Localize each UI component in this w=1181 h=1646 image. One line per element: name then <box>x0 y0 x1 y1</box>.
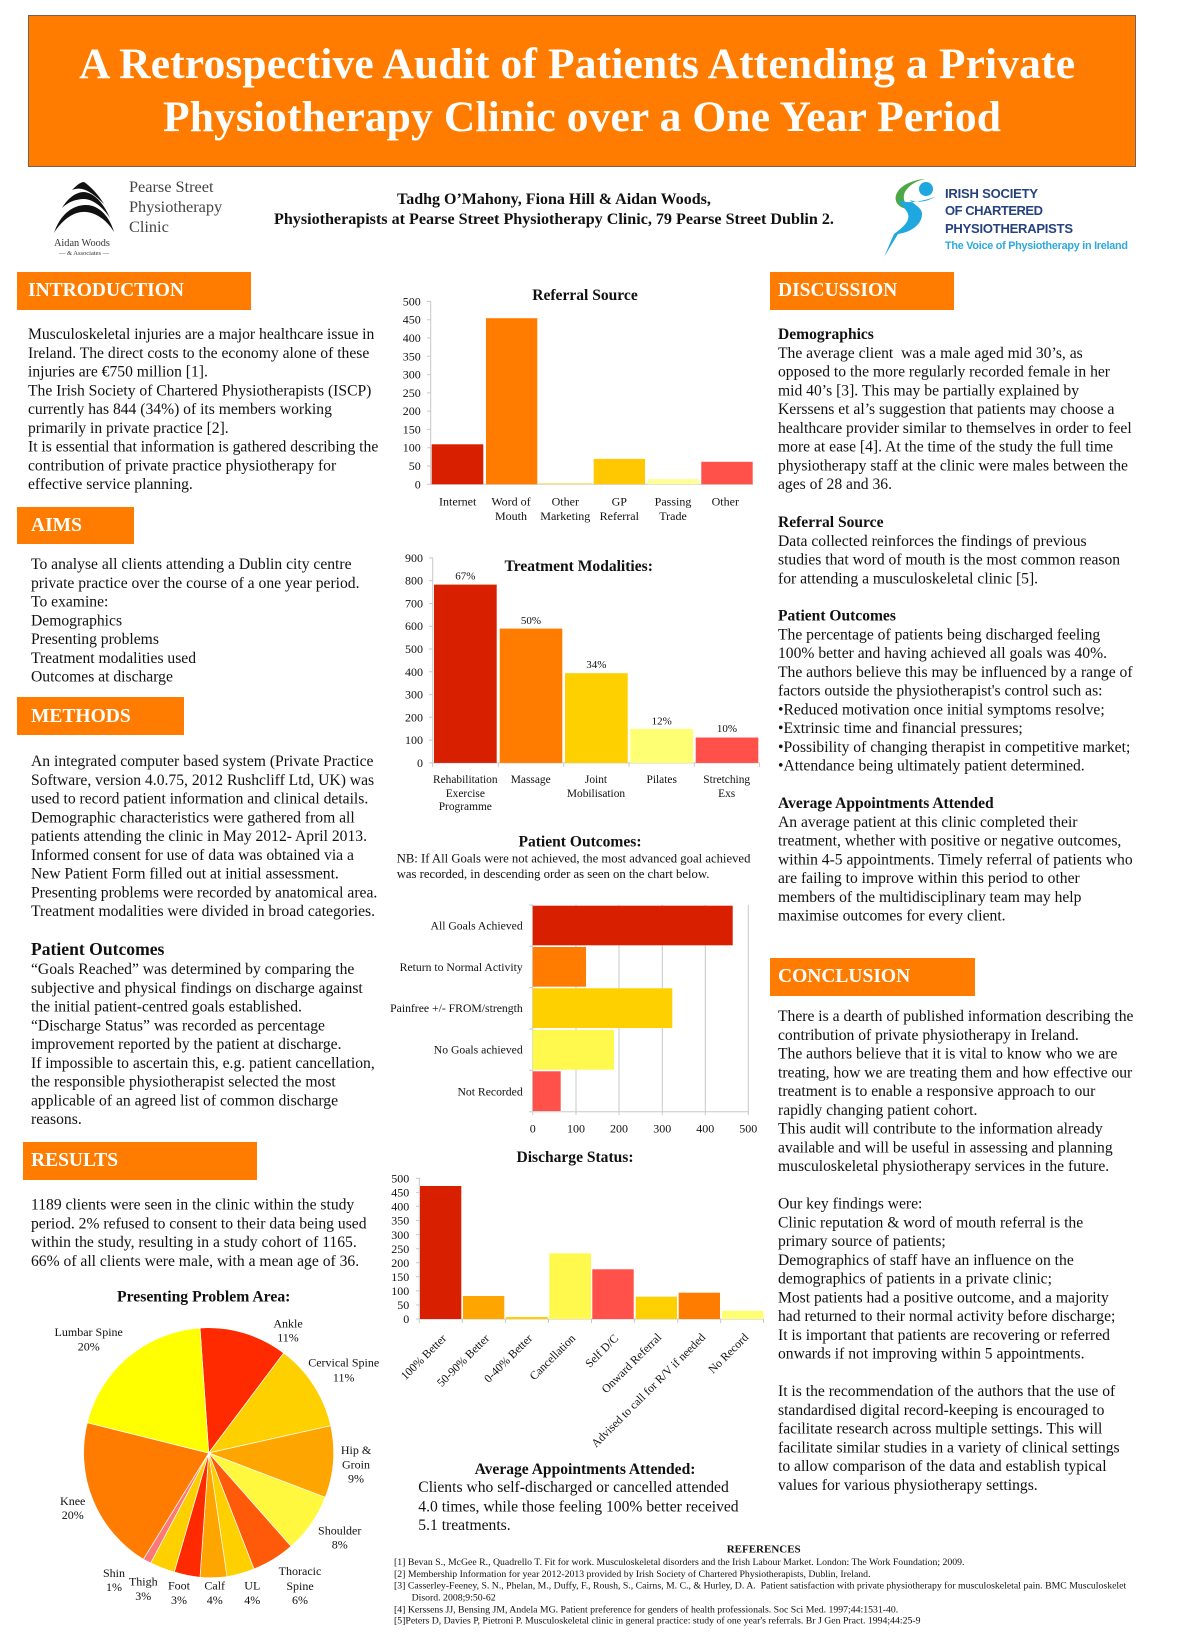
chart: presenting problem area pie <box>55 1289 379 1607</box>
x axis labels: 100 <box>567 1122 585 1136</box>
text block: average appointments: within 4-5 appointments. Timely referral of patients who <box>778 851 1133 868</box>
logo: Pearse Street Physiotherapy Clinic: Aidan Woods <box>54 238 110 249</box>
percentage labels: 34% <box>586 659 606 671</box>
logo: Irish Society of Chartered Physiotherapists <box>884 179 1128 257</box>
text block: demographics: healthcare provider similar to themselves in order to feel <box>778 420 1132 437</box>
chart title: Presenting Problem Area: <box>117 1289 290 1306</box>
category labels: Joint <box>585 774 608 786</box>
text block: referral source <box>778 514 1120 587</box>
text block: introduction: primarily in private practice [2]. <box>28 420 229 437</box>
rotated category labels: Advised to call for R/V if needed <box>589 1331 708 1450</box>
text block: demographics: The average client was a male aged mid 30’s, as <box>778 345 1083 362</box>
text block: recommendation <box>778 1383 1120 1494</box>
pie labels: Groin <box>342 1457 370 1471</box>
y axis labels: 150 <box>391 1270 409 1284</box>
heading: introduction <box>17 272 251 310</box>
y axis labels: 250 <box>403 386 421 400</box>
category labels: Referral <box>600 509 640 523</box>
pie labels: 6% <box>292 1593 308 1607</box>
text block: results: 1189 clients were seen in the clinic within the study <box>31 1197 354 1214</box>
text block: referral source: Data collected reinforces the findings of previous <box>778 533 1087 550</box>
y axis labels: 300 <box>405 688 423 702</box>
text block: introduction: The Irish Society of Chartered Physiotherapists (ISCP) <box>28 382 371 399</box>
category labels: Mouth <box>495 509 527 523</box>
text block: patient outcomes: •Reduced motivation once initial symptoms resolve; <box>778 701 1105 718</box>
text block: average appointments <box>778 795 1133 924</box>
pie slices <box>84 1328 334 1578</box>
chart: referral source <box>403 287 753 523</box>
panel: introduction <box>17 272 378 493</box>
text block: average appointments: members of the multidisciplinary team may help <box>778 889 1082 906</box>
y axis labels: 0 <box>415 477 421 491</box>
text block: key findings: Clinic reputation & word of mouth referral is the <box>778 1214 1083 1231</box>
text block: average appointments attended: 5.1 treatments. <box>418 1517 511 1534</box>
text block: average appointments attended: 4.0 times, while those feeling 100% better received <box>418 1499 739 1516</box>
text block: conclusion: The authors believe that it is vital to know who we are <box>778 1046 1117 1062</box>
category labels: Trade <box>659 509 687 523</box>
logo: Irish Society of Chartered Physiotherapists: IRISH SOCIETY <box>945 186 1038 201</box>
references: Disord. 2008;9:50-62 <box>412 1592 496 1603</box>
bars <box>434 585 758 763</box>
text block: methods: patients attending the clinic in May 2012- April 2013. <box>31 828 367 845</box>
text block: aims: Outcomes at discharge <box>31 668 173 686</box>
text block: methods: Presenting problems were recorded by anatomical area. <box>31 884 377 901</box>
text block: recommendation: facilitate similar studies in a variety of clinical settings <box>778 1439 1120 1456</box>
heading: aims: AIMS <box>31 515 82 536</box>
text block: average appointments attended <box>418 1461 739 1534</box>
chart title: Patient Outcomes: <box>518 834 642 851</box>
text block: aims: To examine: <box>31 594 108 610</box>
axes <box>429 558 760 767</box>
logo: Irish Society of Chartered Physiotherapists: PHYSIOTHERAPISTS <box>945 221 1073 236</box>
text block: patient outcomes method: the initial patient-centred goals established. <box>31 998 302 1016</box>
category labels: Programme <box>439 801 492 813</box>
pie labels: Hip & <box>341 1443 372 1457</box>
panel: discussion <box>770 272 1133 924</box>
text block: demographics: mid 40’s [3]. This may be partially explained by <box>778 382 1079 399</box>
text block: conclusion: rapidly changing patient cohort. <box>778 1102 977 1119</box>
category labels: Mobilisation <box>567 788 625 800</box>
percentage labels: 67% <box>455 571 475 583</box>
text block: patient outcomes: 100% better and having achieved all goals was 40%. <box>778 645 1107 662</box>
x axis labels <box>530 1122 757 1136</box>
category labels: No Goals achieved <box>434 1044 523 1057</box>
text block: patient outcomes: •Extrinsic time and financial pressures; <box>778 720 1023 737</box>
pie labels: Foot <box>168 1579 191 1593</box>
logo: Pearse Street Physiotherapy Clinic: Pearse Street <box>129 177 214 196</box>
text block: recommendation: facilitate research across multiple settings. This will <box>778 1420 1103 1438</box>
category labels: Word of <box>491 495 531 509</box>
y axis labels: 450 <box>391 1186 409 1200</box>
percentage labels <box>455 571 737 735</box>
pie labels: Thoracic <box>279 1564 321 1578</box>
pie labels: 11% <box>333 1370 354 1384</box>
text block: methods: New Patient Form filled out at initial assessment. <box>31 866 339 882</box>
y axis labels: 350 <box>403 349 421 363</box>
pie labels: 9% <box>348 1472 364 1486</box>
bars <box>420 1186 763 1319</box>
text block: demographics: Kerssens et al’s suggestion that patients may choose a <box>778 401 1114 418</box>
text block: recommendation: It is the recommendation of the authors that the use of <box>778 1383 1116 1400</box>
percentage labels: 10% <box>717 723 737 735</box>
text block: methods: An integrated computer based system (Private Practice <box>31 753 373 770</box>
category labels: Stretching <box>703 774 750 786</box>
text block: patient outcomes: Patient Outcomes <box>778 608 896 624</box>
pie labels: 11% <box>277 1331 299 1345</box>
text block: patient outcomes method: improvement reported by the patient at discharge. <box>31 1036 342 1053</box>
text block: patient outcomes method: “Goals Reached” was determined by comparing the <box>31 961 354 978</box>
text block: results: 66% of all clients were male, with a mean age of 36. <box>31 1253 359 1270</box>
rotated category labels: Cancellation <box>527 1332 578 1383</box>
text block: key findings: It is important that patients are recovering or referred <box>778 1327 1110 1344</box>
pie labels: Ankle <box>273 1317 303 1331</box>
panel: results <box>23 1142 367 1270</box>
y axis labels: 500 <box>403 294 421 308</box>
text block: introduction: It is essential that information is gathered describing the <box>28 438 378 456</box>
y axis labels: 400 <box>403 331 421 345</box>
pie labels: Knee <box>60 1494 85 1508</box>
y axis labels: 100 <box>391 1284 409 1298</box>
text block: average appointments: treatment, whether with positive or negative outcomes, <box>778 832 1121 850</box>
text block: patient outcomes <box>778 608 1133 774</box>
note <box>397 851 751 881</box>
text block: demographics: physiotherapy staff at the clinic were males between the <box>778 457 1128 474</box>
logo: Irish Society of Chartered Physiotherapists: The Voice of Physiotherapy in Ireland <box>945 240 1128 252</box>
y axis labels: 900 <box>405 551 423 565</box>
y axis labels: 0 <box>417 756 423 770</box>
text block: conclusion: contribution of private physiotherapy in Ireland. <box>778 1027 1079 1044</box>
references: REFERENCES <box>727 1544 801 1556</box>
text block: aims: Treatment modalities used <box>31 650 196 667</box>
text block: demographics: ages of 28 and 36. <box>778 476 892 493</box>
text block: key findings: demographics of patients in a private clinic; <box>778 1270 1052 1288</box>
text block: conclusion: This audit will contribute to the information already <box>778 1120 1103 1138</box>
pie labels: 1% <box>106 1580 122 1594</box>
text block: methods: Treatment modalities were divided in broad categories. <box>31 903 375 920</box>
chart title: Referral Source <box>532 287 638 304</box>
text block: recommendation: values for various physiotherapy settings. <box>778 1477 1038 1494</box>
y axis labels: 50 <box>397 1298 409 1312</box>
text block: key findings: onwards if not improving within 5 appointments. <box>778 1346 1085 1362</box>
text block: methods: Informed consent for use of data was obtained via a <box>31 847 354 864</box>
chart title: Treatment Modalities: <box>505 558 653 575</box>
text block: introduction: currently has 844 (34%) of its members working <box>28 401 332 418</box>
y axis labels: 250 <box>391 1242 409 1256</box>
y axis labels: 700 <box>405 596 423 610</box>
logo: Pearse Street Physiotherapy Clinic: Clinic <box>129 217 169 236</box>
category labels <box>439 495 739 523</box>
references <box>394 1544 1126 1627</box>
pie labels: Spine <box>286 1579 314 1593</box>
heading: introduction: INTRODUCTION <box>28 280 184 301</box>
text block: patient outcomes method: the responsible physiotherapist selected the most <box>31 1074 336 1090</box>
text block: aims: Presenting problems <box>31 631 159 648</box>
text block: methods <box>31 753 377 920</box>
panel: conclusion <box>770 958 1134 1494</box>
y axis labels <box>403 294 421 491</box>
bars <box>432 318 753 484</box>
text block: results: period. 2% refused to consent to their data being used <box>31 1215 367 1232</box>
pie labels: Shin <box>103 1566 125 1580</box>
pie labels: Lumbar Spine <box>55 1325 123 1339</box>
pie labels: UL <box>244 1579 260 1593</box>
text block: patient outcomes: •Attendance being ultimately patient determined. <box>778 758 1085 774</box>
pie labels: 4% <box>244 1593 260 1607</box>
text block: aims: To analyse all clients attending a Dublin city centre <box>31 556 352 573</box>
text block: introduction <box>28 326 378 493</box>
text block: patient outcomes method <box>31 961 375 1128</box>
text block: introduction: contribution of private practice physiotherapy for <box>28 457 337 474</box>
text block: average appointments: are failing to improve within this period to other <box>778 870 1081 887</box>
references: [5]Peters D, Davies P, Pietroni P. Musculoskeletal clinic in general practice: study of one year's referrals. Br J Gen Pract. 1994;44:25-9 <box>394 1616 921 1627</box>
rotated category labels: No Record <box>706 1331 751 1376</box>
percentage labels: 50% <box>521 615 541 627</box>
logo: Pearse Street Physiotherapy Clinic: — & Associates — <box>58 250 110 257</box>
text block: key findings: primary source of patients; <box>778 1233 946 1250</box>
gridlines and axes <box>529 905 748 1115</box>
y axis labels: 300 <box>403 368 421 382</box>
references: [1] Bevan S., McGee R., Quadrello T. Fit for work. Musculoskeletal disorders and the Irish Labour Market. London: The Work Foundation; 2009. <box>394 1557 964 1568</box>
category labels: Other <box>712 495 739 509</box>
category labels <box>390 919 523 1098</box>
category labels: Return to Normal Activity <box>400 961 523 974</box>
pie labels: 20% <box>78 1339 100 1353</box>
logo: Irish Society of Chartered Physiotherapists: OF CHARTERED <box>945 203 1043 218</box>
category labels: GP <box>612 495 627 509</box>
heading: results <box>23 1142 257 1180</box>
category labels: Exs <box>718 788 736 800</box>
y axis labels: 0 <box>403 1312 409 1326</box>
pie labels <box>55 1317 379 1607</box>
bars <box>533 906 733 1111</box>
text block: patient outcomes method: subjective and physical findings on discharge against <box>31 980 363 997</box>
panel: aims <box>17 507 360 686</box>
y axis labels: 600 <box>405 619 423 633</box>
text block: patient outcomes method: If impossible to ascertain this, e.g. patient cancellation, <box>31 1055 375 1072</box>
pie labels: Cervical Spine <box>308 1356 379 1370</box>
y axis labels: 800 <box>405 574 423 588</box>
note: was recorded, in descending order as seen on the chart below. <box>397 867 709 881</box>
pie labels: 8% <box>332 1538 348 1552</box>
y axis labels: 300 <box>391 1228 409 1242</box>
text block: average appointments: An average patient at this clinic completed their <box>778 814 1078 831</box>
rotated category labels: Onward Referral <box>599 1330 665 1396</box>
text block: demographics: more at ease [4]. At the time of the study the full time <box>778 438 1113 456</box>
text block: key findings: had returned to their normal activity before discharge; <box>778 1308 1115 1325</box>
heading: discussion <box>770 272 954 310</box>
text block: recommendation: to allow comparison of the data and establish typical <box>778 1458 1107 1475</box>
category labels: Internet <box>439 495 477 509</box>
x axis labels: 0 <box>530 1122 536 1136</box>
pie labels: 3% <box>171 1593 187 1607</box>
y axis labels: 400 <box>405 665 423 679</box>
pie labels: 20% <box>62 1508 84 1522</box>
text block: demographics: Demographics <box>778 326 874 343</box>
category labels: Rehabilitation <box>433 774 498 786</box>
text block: referral source: for attending a musculoskeletal clinic [5]. <box>778 570 1038 587</box>
text block: aims: private practice over the course of a one year period. <box>31 575 360 592</box>
text block: aims: Demographics <box>31 612 122 629</box>
text block: introduction: effective service planning. <box>28 476 193 493</box>
text block: patient outcomes: The authors believe this may be influenced by a range of <box>778 664 1133 681</box>
y axis labels: 200 <box>391 1256 409 1270</box>
heading: methods <box>17 697 184 735</box>
category labels: Painfree +/- FROM/strength <box>390 1002 523 1015</box>
x axis labels: 300 <box>653 1122 671 1136</box>
text block: conclusion: treatment is to enable a responsive approach to our <box>778 1083 1096 1100</box>
authors: Tadhg O’Mahony, Fiona Hill & Aidan Woods, <box>397 191 711 208</box>
rotated category labels: Self D/C <box>583 1332 621 1370</box>
text block: conclusion <box>778 1008 1134 1175</box>
heading: results: RESULTS <box>31 1150 118 1171</box>
x axis labels: 200 <box>610 1122 628 1136</box>
category labels: Marketing <box>540 509 590 523</box>
y axis labels: 150 <box>403 422 421 436</box>
y axis labels: 100 <box>405 733 423 747</box>
rotated category labels <box>398 1330 751 1450</box>
percentage labels: 12% <box>652 715 672 727</box>
y axis labels: 50 <box>409 459 421 473</box>
text block: results <box>31 1197 367 1270</box>
chart: treatment modalities <box>405 551 760 813</box>
y axis labels: 350 <box>391 1214 409 1228</box>
references: [2] Membership Information for year 2012-2013 provided by Irish Society of Chartered Physiotherapists, Dublin, Ireland. <box>394 1569 871 1580</box>
axes <box>427 301 753 484</box>
category labels: Exercise <box>446 788 485 800</box>
text block: aims <box>31 556 360 686</box>
text block: patient outcomes method: applicable of an agreed list of common discharge <box>31 1092 338 1109</box>
title banner <box>28 16 1136 166</box>
y axis labels: 100 <box>403 441 421 455</box>
text block: average appointments attended: Clients who self-discharged or cancelled attended <box>418 1479 729 1496</box>
text block: referral source: Referral Source <box>778 514 884 531</box>
x axis labels: 500 <box>739 1122 757 1136</box>
text block: referral source: studies that word of mouth is the most common reason <box>778 552 1120 568</box>
references: [4] Kerssens JJ, Bensing JM, Andela MG. Patient preference for genders of health professionals. Soc Sci Med. 1997;44:1531-40. <box>394 1604 898 1615</box>
text block: patient outcomes: factors outside the physiotherapist's control such as: <box>778 682 1102 700</box>
text block: conclusion: treating, how we are treating them and how effective our <box>778 1064 1133 1081</box>
category labels: Passing <box>655 495 691 509</box>
text block: recommendation: standardised digital record-keeping is encouraged to <box>778 1402 1105 1419</box>
text block: key findings: Demographics of staff have an influence on the <box>778 1252 1074 1269</box>
rotated category labels: 100% Better <box>398 1332 449 1383</box>
logo: Pearse Street Physiotherapy Clinic <box>54 177 223 257</box>
text block: demographics <box>778 326 1132 493</box>
rotated category labels: 0-40% Better <box>482 1332 535 1385</box>
rotated category labels: 50-90% Better <box>435 1332 492 1390</box>
references: [3] Casserley-Feeney, S. N., Phelan, M., Duffy, F., Roush, S., Cairns, M. C., & Hurley, D. A. Patient satisfaction with private physiotherapy for musculoskeletal pain. BMC Musculoskelet <box>394 1581 1126 1592</box>
y axis labels: 450 <box>403 313 421 327</box>
pie labels: Shoulder <box>318 1524 361 1538</box>
category labels: Not Recorded <box>457 1085 523 1098</box>
text block: patient outcomes method: reasons. <box>31 1111 82 1128</box>
y axis labels <box>405 551 423 770</box>
y axis labels: 200 <box>405 710 423 724</box>
panel: methods <box>17 697 377 1128</box>
text block: key findings <box>778 1196 1115 1362</box>
text block: average appointments attended: Average Appointments Attended: <box>475 1461 695 1478</box>
text block: methods: Demographic characteristics were gathered from all <box>31 809 355 826</box>
text block: patient outcomes method: “Discharge Status” was recorded as percentage <box>31 1017 325 1034</box>
title banner: A Retrospective Audit of Patients Attending a Private <box>79 40 1075 88</box>
pie labels: Thigh <box>129 1575 158 1589</box>
text block: methods: Software, version 4.0.75, 2012 Rushcliff Ltd, UK) was <box>31 772 374 789</box>
text block: patient outcomes: •Possibility of changing therapist in competitive market; <box>778 739 1130 756</box>
heading: methods: METHODS <box>31 706 131 727</box>
y axis labels: 500 <box>405 642 423 656</box>
y axis labels: 500 <box>391 1172 409 1186</box>
chart: discharge status <box>391 1149 764 1450</box>
logo: Pearse Street Physiotherapy Clinic: Physiotherapy <box>129 197 223 216</box>
category labels: Other <box>552 495 579 509</box>
chart title: Discharge Status: <box>516 1149 634 1166</box>
text block: average appointments: Average Appointments Attended <box>778 795 994 812</box>
y axis labels: 200 <box>403 404 421 418</box>
category labels: All Goals Achieved <box>431 919 523 932</box>
heading: patient outcomes method: Patient Outcomes <box>31 939 165 959</box>
text block: introduction: Ireland. The direct costs to the economy alone of these <box>28 345 369 362</box>
text block: key findings: Most patients had a positive outcome, and a majority <box>778 1289 1109 1306</box>
text block: methods: used to record patient information and clinical details. <box>31 790 368 808</box>
text block: conclusion: available and will be useful in assessing and planning <box>778 1139 1113 1156</box>
note: NB: If All Goals were not achieved, the most advanced goal achieved <box>397 851 751 865</box>
heading: discussion: DISCUSSION <box>778 280 897 301</box>
heading: aims <box>17 507 134 544</box>
pie labels: 4% <box>207 1593 223 1607</box>
x axis labels: 400 <box>696 1122 714 1136</box>
authors <box>274 191 834 228</box>
category labels <box>433 774 750 813</box>
text block: conclusion: There is a dearth of published information describing the <box>778 1008 1134 1025</box>
text block: introduction: injuries are €750 million [1]. <box>28 364 208 380</box>
y axis labels <box>391 1172 409 1326</box>
text block: results: within the study, resulting in a study cohort of 1165. <box>31 1234 357 1251</box>
heading: conclusion: CONCLUSION <box>778 966 910 987</box>
title banner: Physiotherapy Clinic over a One Year Period <box>163 93 1001 141</box>
text block: patient outcomes: The percentage of patients being discharged feeling <box>778 626 1100 643</box>
text block: average appointments: maximise outcomes for every client. <box>778 908 1006 924</box>
text block: demographics: opposed to the more regularly recorded female in her <box>778 364 1111 380</box>
category labels: Massage <box>511 774 551 786</box>
heading: conclusion <box>770 958 975 996</box>
text block: introduction: Musculoskeletal injuries are a major healthcare issue in <box>28 326 375 343</box>
text block: key findings: Our key findings were: <box>778 1196 922 1212</box>
pie labels: 3% <box>135 1589 151 1603</box>
y axis labels: 400 <box>391 1200 409 1214</box>
text block: conclusion: musculoskeletal physiotherapy services in the future. <box>778 1158 1109 1175</box>
pie labels: Calf <box>204 1579 225 1593</box>
authors: Physiotherapists at Pearse Street Physiotherapy Clinic, 79 Pearse Street Dublin 2. <box>274 211 834 228</box>
category labels: Pilates <box>647 774 677 786</box>
chart: patient outcomes <box>390 834 757 1136</box>
axes <box>416 1178 764 1323</box>
